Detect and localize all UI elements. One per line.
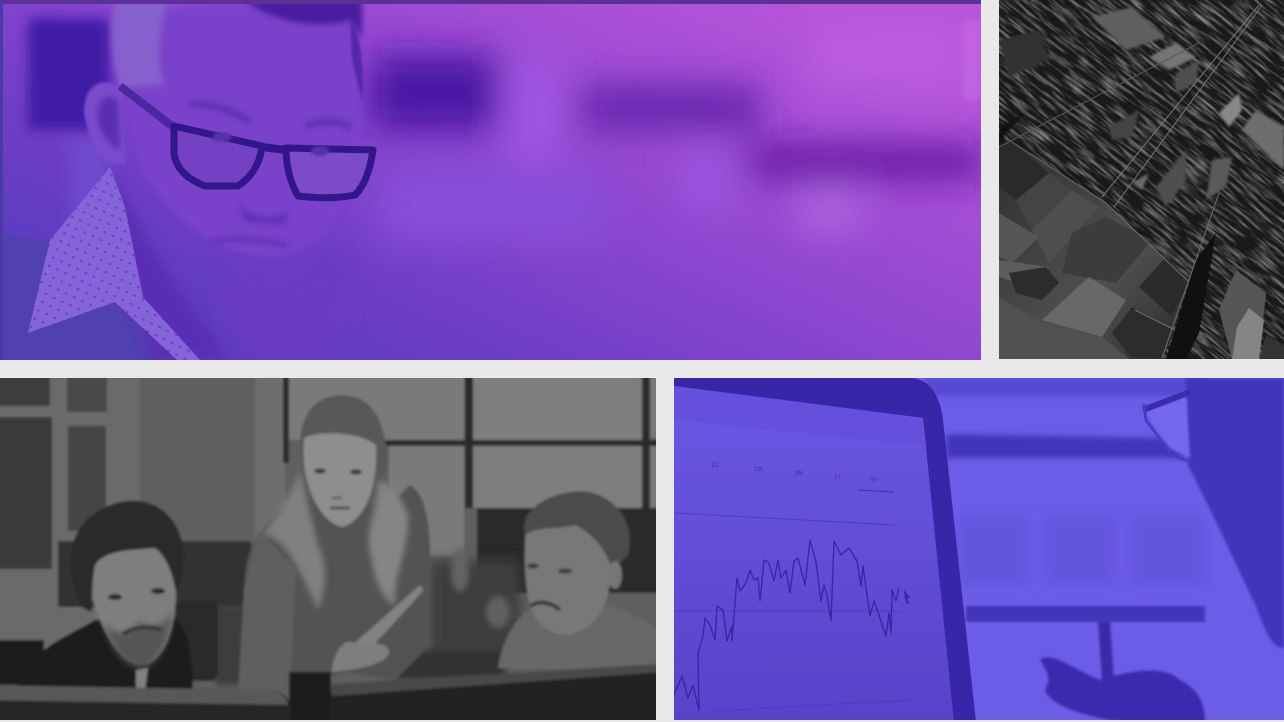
head with glasses [1143,378,1284,648]
blurred desk [0,548,520,685]
man: glasses [120,86,373,198]
foreground monitors [0,663,676,722]
man on left [17,501,193,690]
upper grid tiles [999,7,1284,207]
photo: three colleagues at a monitor, grayscale [0,360,680,722]
man: dotted collar [28,167,200,360]
timeframe labels: 1Y [834,475,841,481]
blurred office background [28,18,985,240]
woman [238,395,430,722]
pen and hand [1040,621,1205,722]
man on right [496,490,656,670]
man: face and neck [84,0,363,360]
photo: dark digital data grid [999,0,1284,359]
timeframe labels: 3M [795,471,803,477]
lower-right tiles [1166,233,1284,359]
photo: man with glasses, purple tint [0,0,985,360]
timeframe labels: 5Y [871,478,878,484]
lower-left large tiles [999,140,1189,360]
wall and window frames [58,360,676,607]
timeframe labels: 1M [754,467,762,473]
left window [0,378,140,648]
chart cursor [904,590,910,604]
stock chart line [674,540,899,710]
perspective lines [999,5,1262,358]
blurred background sheets [925,378,1205,622]
timeframe labels: 1D [711,463,719,469]
tablet [674,378,976,722]
photo: tablet with stock chart, blue tint [674,378,1284,722]
timeframe labels [711,463,878,484]
man: shirt [3,236,149,360]
